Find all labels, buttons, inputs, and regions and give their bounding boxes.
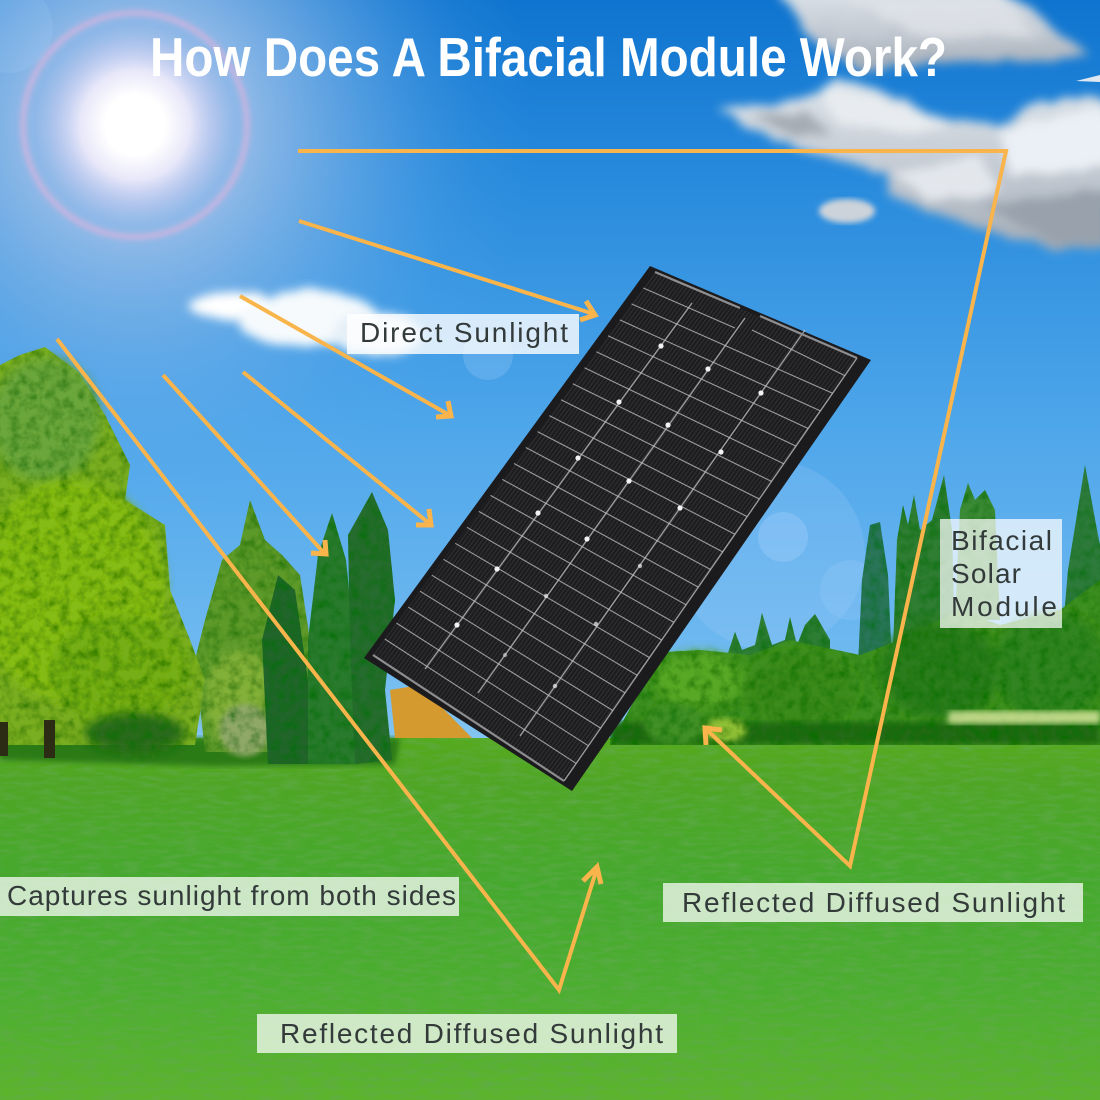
cloud top	[775, 0, 1088, 70]
arrow: direct sunlight low	[163, 375, 326, 554]
panel frame	[364, 266, 871, 791]
label: bifacial solar module: Solar	[951, 558, 1021, 589]
orange shrub behind panel	[390, 685, 472, 738]
panel edge busbars	[373, 272, 857, 781]
label: captures sunlight: Captures sunlight from both sides	[7, 880, 456, 911]
label: bifacial solar module	[940, 519, 1062, 628]
cloud middle	[715, 78, 1100, 250]
arrow: direct sunlight through cloud	[240, 296, 451, 417]
arrow: direct sunlight to panel top	[299, 221, 595, 320]
solar panel	[364, 266, 871, 791]
label: bifacial solar module: Bifacial	[951, 525, 1052, 556]
lawn shadow under left trees	[0, 738, 400, 766]
label: reflected diffused sunlight right: Reflected Diffused Sunlight	[682, 887, 1065, 918]
panel grid lines	[385, 279, 857, 781]
arrow: direct sunlight mid	[243, 372, 431, 525]
sliver cloud	[1076, 75, 1100, 82]
small cloud	[819, 199, 875, 223]
arrow: reflected sunlight right bounce	[298, 151, 1006, 866]
panel cells	[373, 272, 857, 781]
clouds upper right	[715, 0, 1100, 250]
lens flare circles	[463, 330, 880, 650]
lawn	[0, 738, 1100, 1100]
arrow: reflected sunlight left bounce	[57, 339, 601, 990]
title: How Does A Bifacial Module Work?	[150, 26, 947, 88]
label: direct sunlight: Direct Sunlight	[360, 317, 568, 348]
panel junction dots	[454, 343, 764, 688]
label: direct sunlight	[347, 314, 579, 354]
background trees and hedges on the right	[610, 465, 1100, 745]
white flower hedge	[948, 711, 1100, 724]
background: blue sky	[0, 0, 1100, 770]
tree trunks	[0, 720, 55, 758]
big left tree and middle trees	[0, 347, 395, 764]
label: bifacial solar module: Module	[951, 591, 1057, 622]
sun with halo ring	[0, 0, 535, 525]
label: reflected diffused sunlight bottom: Reflected Diffused Sunlight	[280, 1018, 663, 1049]
cloud behind direct sunlight label	[190, 292, 423, 357]
